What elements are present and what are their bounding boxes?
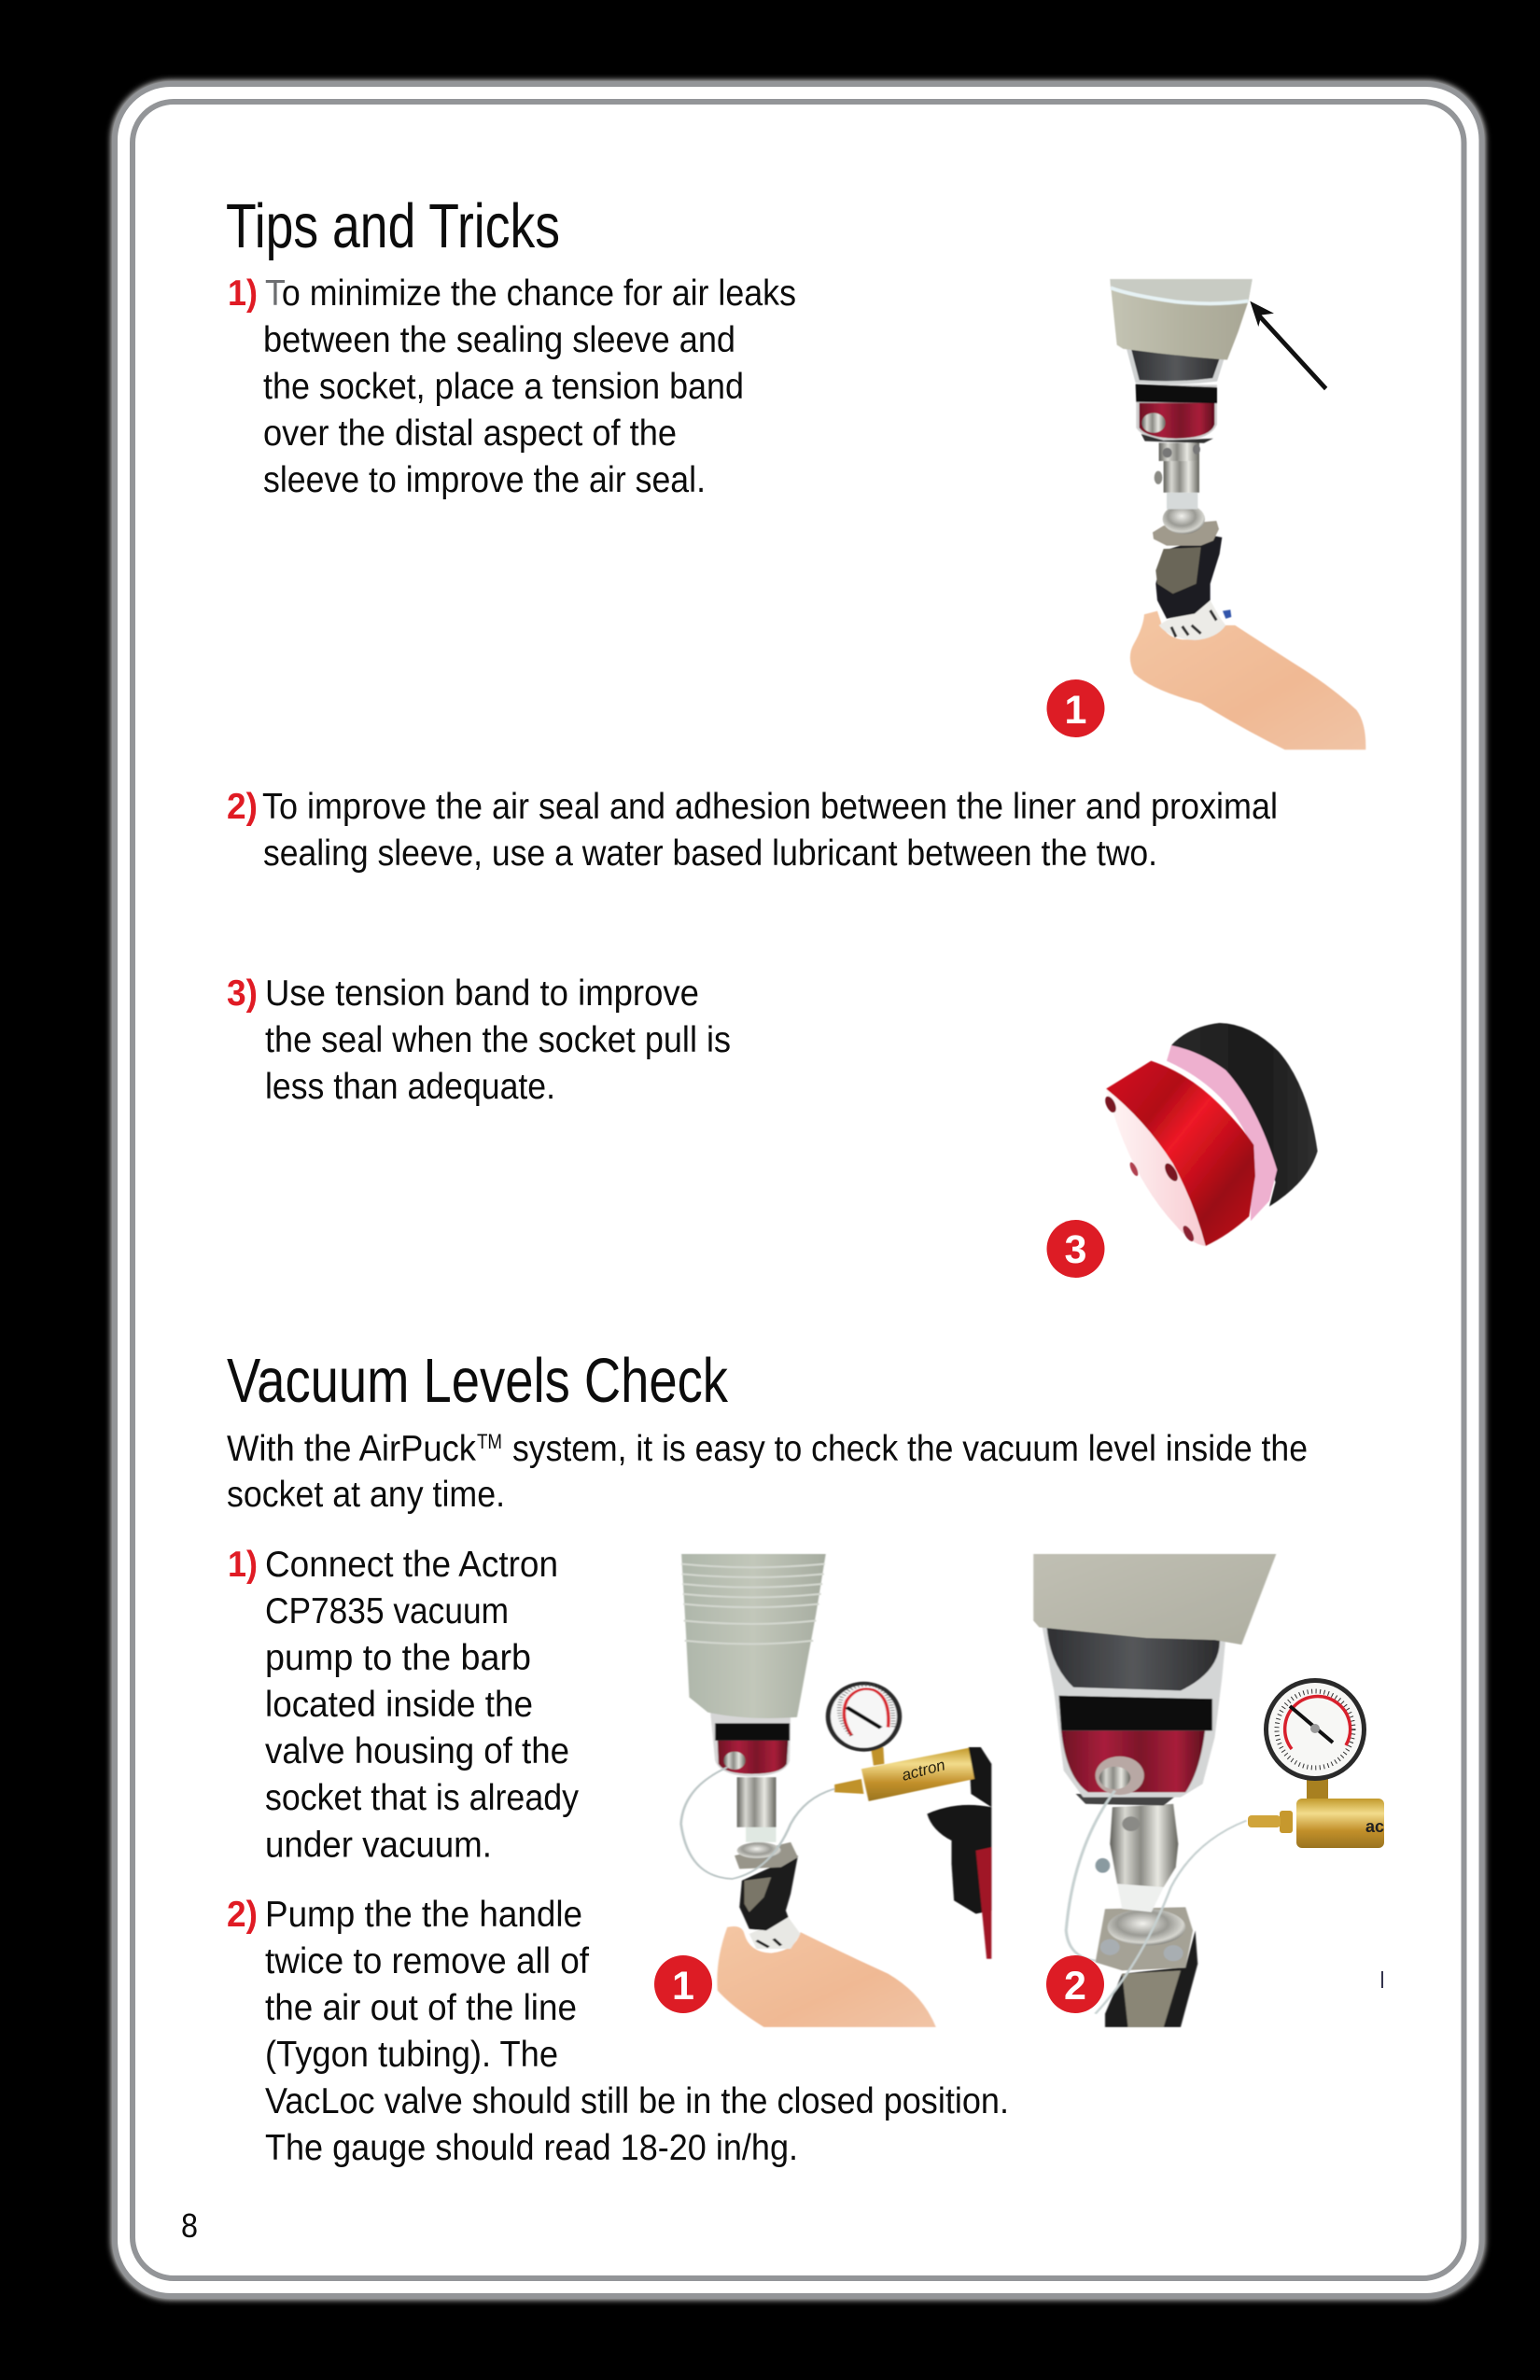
tip 2 text: 2) — [227, 787, 258, 827]
tip 3 text: less than adequate. — [265, 1067, 555, 1107]
badge 2: close-up photo — [1046, 1955, 1104, 2013]
gauge and pump — [1248, 1678, 1384, 1848]
photo 1: vacuum pump attached to leg — [681, 1554, 991, 2027]
step 2 text: the air out of the line — [265, 1988, 577, 2028]
tip 2 text: To improve the air seal and adhesion between the liner and proximal — [262, 787, 1278, 827]
tip 1 text: sleeve to improve the air seal. — [263, 460, 706, 500]
badge 1: pump photo: 1 — [672, 1964, 694, 2009]
step 1 text: under vacuum. — [265, 1826, 492, 1865]
step 1 text: 1) — [228, 1545, 258, 1585]
step 1 text — [228, 1545, 579, 1865]
badge 1: leg photo — [1047, 679, 1105, 737]
badge 1: pump photo — [654, 1955, 712, 2013]
badge 1: leg photo: 1 — [1065, 688, 1086, 733]
tip 1 text: between the sealing sleeve and — [263, 320, 735, 360]
badge 3: airpuck photo: 3 — [1065, 1227, 1086, 1272]
tip 1 text: the socket, place a tension band — [263, 367, 744, 407]
section: tips and tricks — [226, 191, 1278, 1107]
tip 1 text: over the distal aspect of the — [263, 413, 677, 454]
section: vacuum levels check — [227, 1346, 1308, 2168]
gauge and pump: ac — [1365, 1817, 1384, 1836]
badge 2: close-up photo: 2 — [1064, 1964, 1086, 2009]
photo 2: close-up of gauge reading — [1033, 1554, 1384, 2027]
step 1 text: socket that is already — [265, 1778, 579, 1818]
step 1 text: valve housing of the — [265, 1731, 569, 1771]
intro text: system, it is easy to check the vacuum level inside the — [512, 1429, 1308, 1469]
step 2 text: Pump the the handle — [265, 1895, 582, 1935]
tip 3 text: Use tension band to improve — [265, 973, 699, 1014]
step 2 text: The gauge should read 18-20 in/hg. — [265, 2128, 798, 2168]
photo: prosthetic leg with tension band — [1110, 279, 1365, 749]
page number: 8 — [181, 2206, 198, 2245]
step 2 text: 2) — [227, 1895, 258, 1935]
tip 3 text — [227, 973, 731, 1107]
intro text: socket at any time. — [227, 1475, 505, 1515]
tip 2 text — [227, 787, 1278, 874]
intro text — [227, 1429, 1308, 1515]
step 1 text: Connect the Actron — [265, 1545, 558, 1585]
small mark at image edge — [1381, 1971, 1383, 1988]
step 1 text: pump to the barb — [265, 1638, 531, 1678]
step 2 text: twice to remove all of — [265, 1941, 589, 1981]
step 2 text: (Tygon tubing). The — [265, 2035, 558, 2075]
close-up leg — [1033, 1554, 1276, 2027]
intro text: With the AirPuck — [227, 1429, 476, 1469]
heading: tips and tricks: Tips and Tricks — [226, 191, 560, 261]
step 2 text — [227, 1895, 1009, 2168]
step 1 text: located inside the — [265, 1685, 533, 1725]
tip 1 text — [228, 273, 796, 500]
pump logo: actron — [900, 1756, 947, 1785]
tip 3 text: the seal when the socket pull is — [265, 1020, 731, 1060]
intro text: TM — [477, 1430, 502, 1453]
tip 1 text: To minimize the chance for air leaks — [265, 273, 796, 314]
leg, gauge and pump drawing — [681, 1554, 991, 2027]
step 2 text: VacLoc valve should still be in the closed position. — [265, 2081, 1009, 2121]
heading: vacuum levels check: Vacuum Levels Check — [227, 1346, 728, 1416]
tip 2 text: sealing sleeve, use a water based lubricant between the two. — [263, 833, 1157, 874]
tip 1 text: 1) — [228, 273, 258, 314]
tip 3 text: 3) — [227, 973, 258, 1014]
step 1 text: CP7835 vacuum — [265, 1591, 509, 1631]
badge 3: airpuck photo — [1047, 1220, 1105, 1278]
photo: airpuck with tension band — [1103, 1023, 1318, 1246]
arrow: points to tension band — [1250, 301, 1326, 388]
